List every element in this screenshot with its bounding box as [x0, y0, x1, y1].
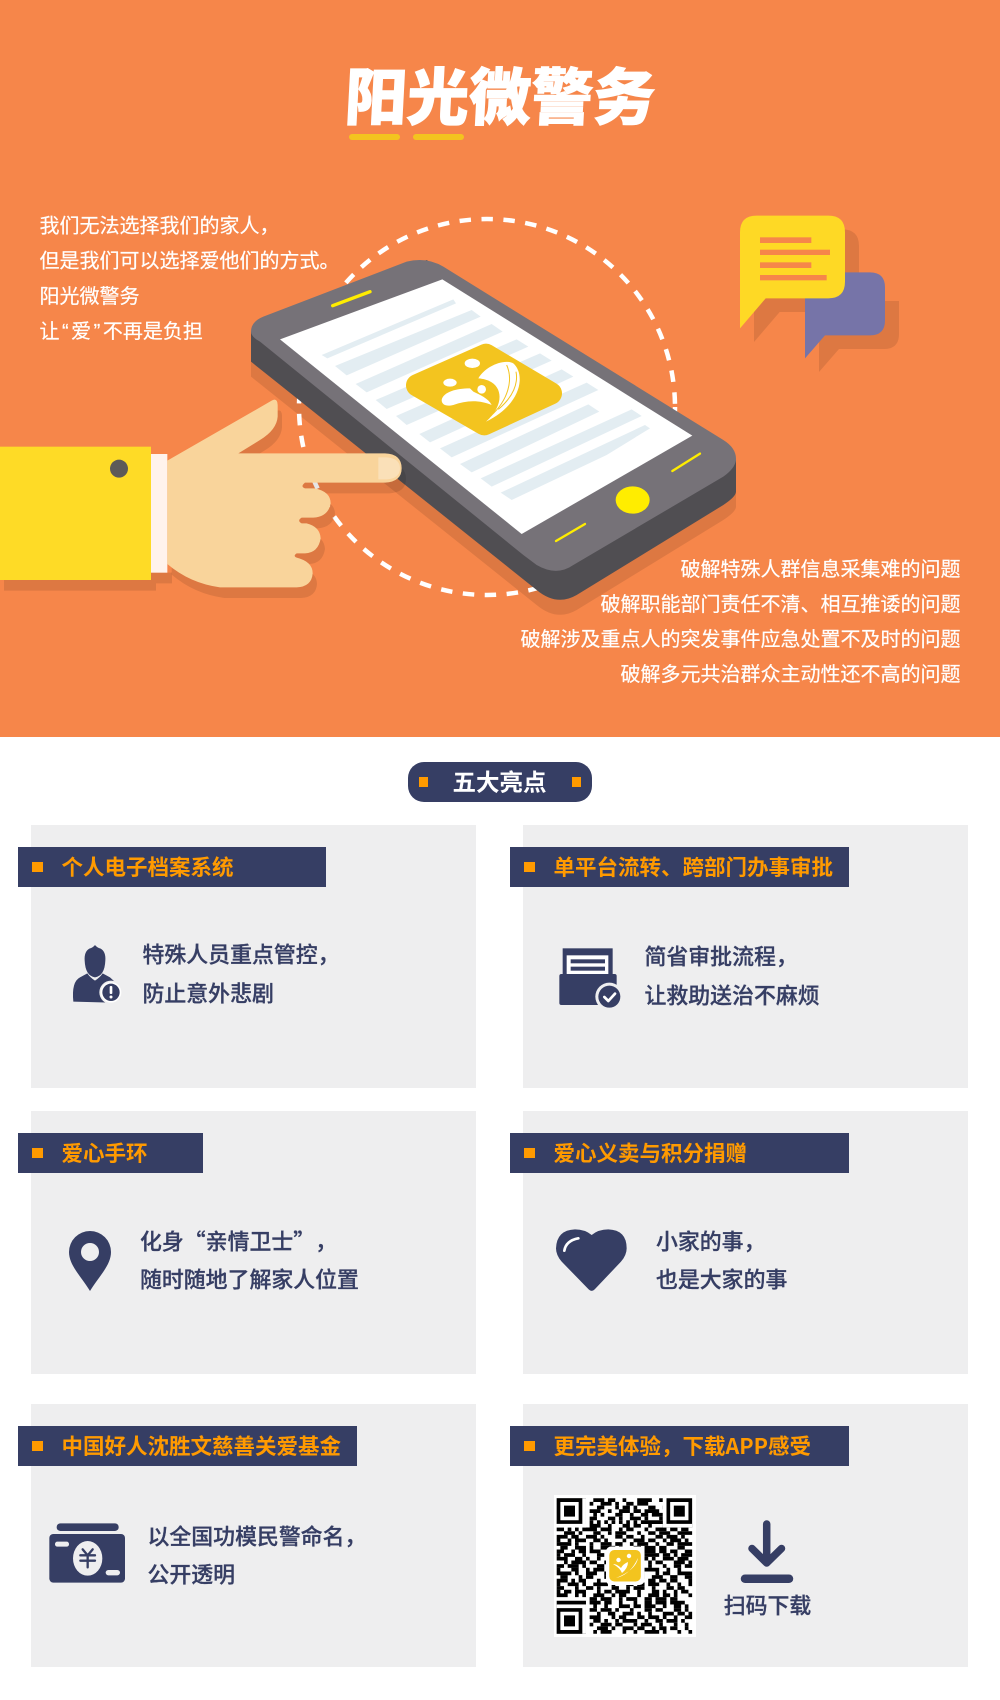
intro text block: 我们无法选择我们的家人，: [40, 210, 280, 238]
intro text block: 但是我们可以选择爱他们的方式。: [40, 245, 340, 274]
icon: heart: [556, 1229, 627, 1291]
icon: folder check: [559, 948, 623, 1011]
icon: download arrow: [745, 1524, 789, 1579]
illustration: pointing hand: [0, 400, 406, 598]
panel: orange hero: [0, 0, 1000, 737]
panel: download app: 更完美体验，下载APP感受: [554, 1430, 811, 1461]
text block: problems solved: 破解职能部门责任不清、相互推诿的问题: [600, 588, 960, 617]
panel: cross-department approval: [510, 825, 968, 1088]
panel: charity fund: 中国好人沈胜文慈善关爱基金: [62, 1430, 342, 1461]
panel: love bracelet: 爱心手环: [62, 1137, 148, 1168]
panel: charity sale: 爱心义卖与积分捐赠: [554, 1137, 747, 1168]
panel: cross-department approval: 简省审批流程，: [644, 940, 798, 972]
illustration: phone with dashed circle: [251, 219, 736, 615]
panel: charity fund: 以全国功模民警命名，: [148, 1520, 366, 1552]
panel: personal archive: 个人电子档案系统: [62, 851, 234, 882]
panel: charity sale: 也是大家的事: [656, 1264, 787, 1294]
text block: problems solved: 破解涉及重点人的突发事件应急处置不及时的问题: [520, 623, 960, 652]
panel: charity sale: [510, 1111, 968, 1374]
panel: cross-department approval: 让救助送治不麻烦: [644, 980, 820, 1010]
icon: location pin: [69, 1231, 111, 1291]
QR code: [554, 1495, 696, 1637]
phone shadow: [251, 275, 736, 615]
dashed circle: [299, 219, 675, 595]
panel: personal archive: 防止意外悲剧: [142, 978, 274, 1008]
download label: 扫码下载: [724, 1590, 811, 1620]
panel: love bracelet: [18, 1111, 476, 1374]
heading pill: five highlights: 五大亮点: [452, 764, 546, 798]
panel: love bracelet: 化身“亲情卫士”，: [140, 1226, 337, 1256]
panel: charity sale: 小家的事，: [656, 1226, 765, 1256]
text block: problems solved: [520, 553, 960, 687]
icon: money: [49, 1523, 125, 1583]
title: 阳光微警务: [343, 48, 658, 137]
panel: cross-department approval: 单平台流转、跨部门办事审批: [554, 851, 833, 882]
intro text block: 让“爱”不再是负担: [40, 320, 203, 343]
app icon: [417, 355, 551, 424]
heading pill: five highlights: [408, 762, 592, 802]
QR center logo: [606, 1546, 644, 1585]
panel: download app: [510, 1404, 968, 1667]
text block: problems solved: 破解特殊人群信息采集难的问题: [680, 553, 960, 582]
sleeve: [0, 447, 151, 580]
icon: chat bubbles: [740, 216, 899, 372]
panel: personal archive: 特殊人员重点管控，: [142, 938, 340, 970]
phone body: [251, 260, 736, 600]
icon: person alert: [73, 945, 123, 1004]
intro text block: [40, 210, 340, 343]
text block: problems solved: 破解多元共治群众主动性还不高的问题: [620, 658, 960, 687]
panel: love bracelet: 随时随地了解家人位置: [140, 1264, 359, 1294]
sleeve shadow: [4, 573, 172, 591]
intro text block: 阳光微警务: [40, 280, 140, 309]
panel: charity fund: 公开透明: [148, 1558, 235, 1590]
panel: charity fund: [18, 1404, 476, 1667]
panel: personal archive: [18, 825, 476, 1088]
hand: [167, 400, 402, 587]
